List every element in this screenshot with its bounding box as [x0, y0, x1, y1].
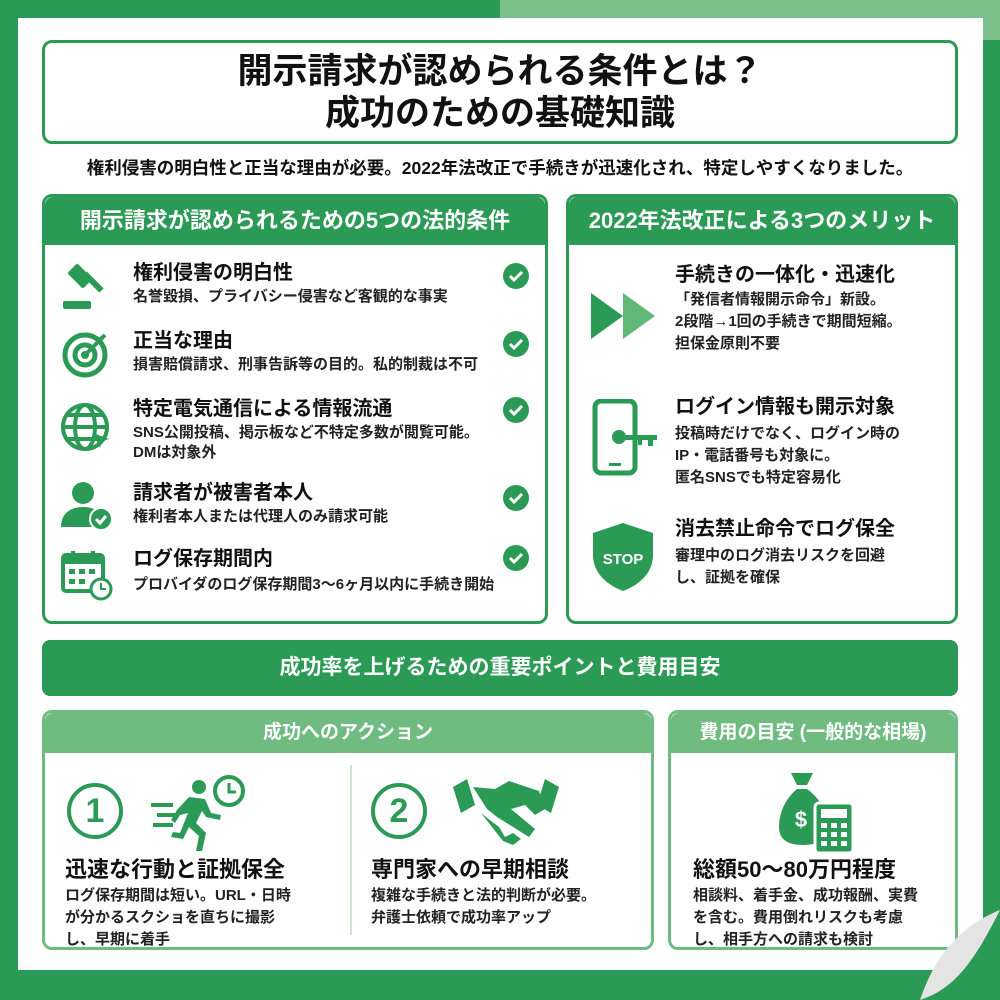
panel heading: 2022年法改正による3つのメリット	[589, 208, 935, 233]
icon: number 2: 2	[390, 792, 408, 830]
icon: user check	[61, 482, 111, 529]
icon: globe	[61, 403, 109, 451]
icon: money bag calculator: $	[795, 807, 807, 832]
title: 開示請求が認められる条件とは？	[237, 52, 762, 91]
merit 2: ログイン情報も開示対象	[675, 396, 895, 418]
icon: stop shield: STOP	[603, 551, 643, 568]
item 4: 請求者が被害者本人	[133, 482, 313, 504]
merit 2: 投稿時だけでなく、ログイン時の	[675, 425, 900, 442]
merit 2	[592, 396, 900, 486]
icon: check	[503, 485, 529, 511]
action 1	[65, 775, 291, 948]
action 1: 迅速な行動と証拠保全	[65, 857, 285, 882]
panel heading	[671, 713, 955, 753]
title	[42, 40, 958, 144]
panel: cost	[668, 710, 958, 950]
merit 3: 審理中のログ消去リスクを回避	[675, 547, 885, 564]
icon: check	[503, 545, 529, 571]
panel: 2022 merits	[566, 194, 958, 624]
merit 2: 匿名SNSでも特定容易化	[675, 469, 841, 486]
panel heading: 開示請求が認められるための5つの法的条件	[80, 208, 510, 233]
icon: gavel	[63, 264, 104, 309]
panel heading: 成功へのアクション	[263, 722, 433, 743]
icon: phone key	[592, 399, 657, 476]
icon: check	[503, 331, 529, 357]
item 3	[61, 397, 529, 461]
panel heading: 費用の目安 (一般的な相場)	[700, 722, 926, 743]
panel: cost: し、相手方への請求も検討	[693, 931, 873, 948]
merit 3: し、証拠を確保	[675, 569, 780, 586]
panel: legal conditions	[42, 194, 548, 624]
item 5	[61, 545, 529, 600]
action 2: 複雑な手続きと法的判断が必要。	[371, 887, 596, 904]
panel: cost: 相談料、着手金、成功報酬、実費	[693, 887, 918, 904]
item 1: 権利侵害の明白性	[133, 262, 293, 284]
panel: actions	[42, 710, 654, 950]
action 2: 専門家への早期相談	[371, 857, 569, 882]
icon: check	[503, 397, 529, 423]
item 3: 特定電気通信による情報流通	[133, 398, 392, 420]
merit 1: 手続きの一体化・迅速化	[675, 264, 895, 286]
item 4: 権利者本人または代理人のみ請求可能	[133, 508, 388, 525]
panel heading	[45, 713, 651, 753]
title: 成功のための基礎知識	[325, 94, 675, 133]
item 1: 名誉毀損、プライバシー侵害など客観的な事実	[133, 288, 448, 305]
action 2: 弁護士依頼で成功率アップ	[371, 909, 551, 926]
item 2	[62, 330, 529, 378]
merit 3: 消去禁止命令でログ保全	[675, 518, 895, 540]
merit 2: IP・電話番号も対象に。	[675, 447, 839, 464]
icon: target	[62, 332, 108, 378]
panel: cost: を含む。費用倒れリスクも考慮	[693, 909, 903, 926]
panel: cost: 総額50〜80万円程度	[693, 857, 896, 882]
item 3: DMは対象外	[133, 444, 216, 461]
background light area	[500, 0, 1000, 40]
icon: fast forward	[591, 293, 655, 339]
page curl	[920, 910, 1000, 1000]
banner: 成功率を上げるための重要ポイントと費用目安	[280, 656, 720, 679]
subtitle: 権利侵害の明白性と正当な理由が必要。2022年法改正で手続きが迅速化され、特定しやすくなりました。	[87, 158, 913, 178]
banner	[42, 640, 958, 696]
icon: number 1: 1	[86, 792, 104, 830]
icon: runner clock	[151, 775, 245, 851]
item 4	[61, 482, 529, 529]
icon: check	[503, 263, 529, 289]
item 1	[63, 262, 529, 309]
item 2: 正当な理由	[133, 330, 233, 352]
icon: calendar clock	[61, 551, 112, 600]
action 2	[371, 779, 596, 926]
icon: number 2	[371, 783, 427, 839]
icon: handshake	[453, 779, 559, 845]
panel heading	[45, 197, 545, 245]
item 5: ログ保存期間内	[133, 548, 273, 570]
merit 1: 「発信者情報開示命令」新設。	[675, 291, 885, 308]
icon: money bag calculator	[779, 773, 852, 852]
icon: number 1	[67, 783, 123, 839]
icon: stop shield	[593, 523, 653, 591]
item 5: プロバイダのログ保存期間3〜6ヶ月以内に手続き開始	[133, 576, 494, 593]
merit 1: 担保金原則不要	[675, 335, 780, 352]
action 1: が分かるスクショを直ちに撮影	[65, 909, 275, 926]
merit 1	[591, 264, 902, 352]
item 3: SNS公開投稿、掲示板など不特定多数が閲覧可能。	[133, 424, 479, 441]
panel heading	[569, 197, 955, 245]
merit 1: 2段階→1回の手続きで期間短縮。	[675, 313, 902, 330]
action 1: ログ保存期間は短い。URL・日時	[65, 887, 291, 904]
merit 3	[593, 518, 895, 591]
item 2: 損害賠償請求、刑事告訴等の目的。私的制裁は不可	[133, 356, 478, 373]
action 1: し、早期に着手	[65, 931, 170, 948]
